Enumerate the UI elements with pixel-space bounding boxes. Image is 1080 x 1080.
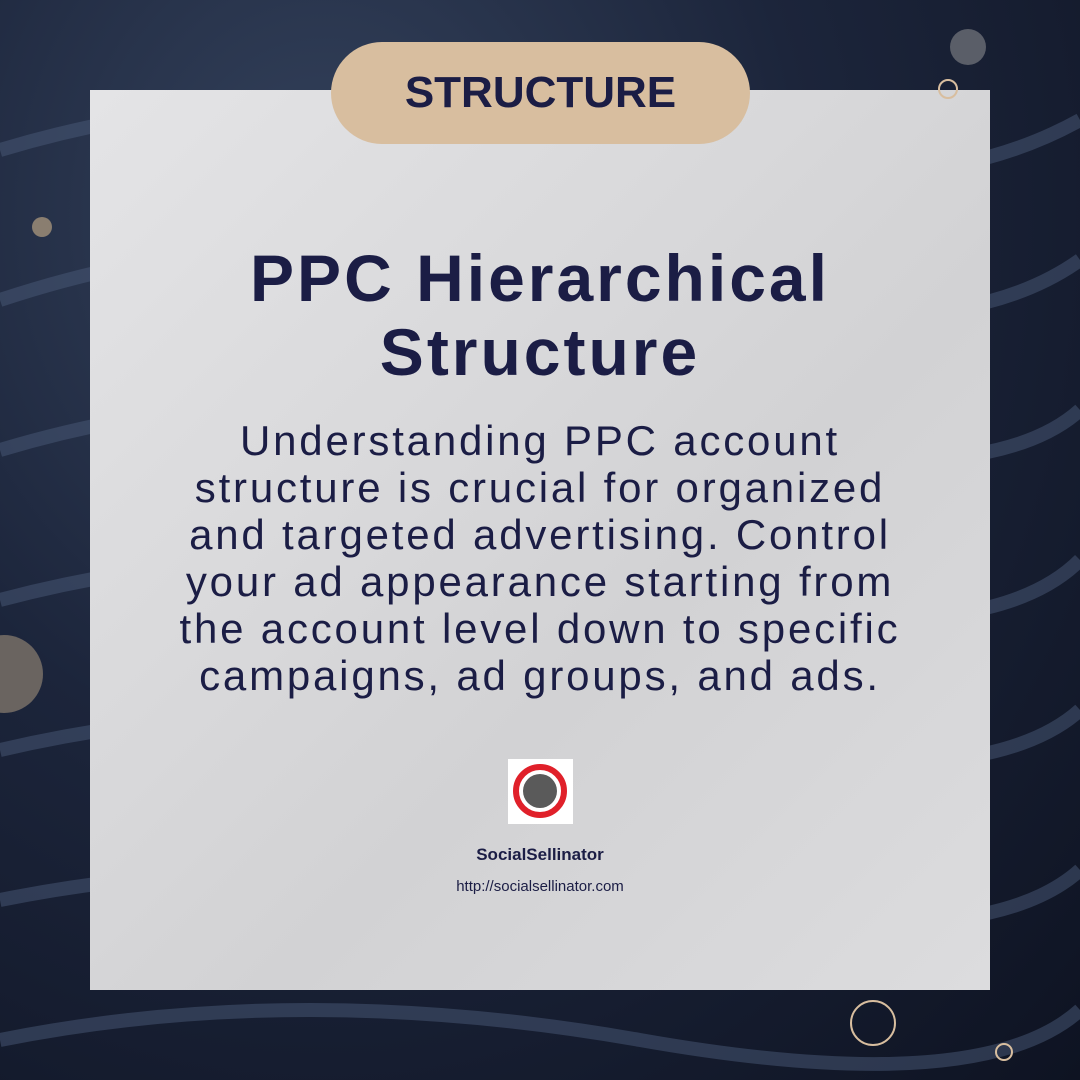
brand name: SocialSellinator xyxy=(476,845,604,864)
body text: and targeted advertising. Control xyxy=(189,511,891,558)
url: http://socialsellinator.com xyxy=(456,878,624,895)
body text: Understanding PPC account xyxy=(240,417,840,464)
body text: campaigns, ad groups, and ads. xyxy=(199,652,881,699)
body text: your ad appearance starting from xyxy=(186,558,894,605)
tag: STRUCTURE: STRUCTURE xyxy=(405,68,676,117)
body text: the account level down to specific xyxy=(180,605,900,652)
body text: structure is crucial for organized xyxy=(195,464,885,511)
title: Structure xyxy=(380,315,700,389)
tag: STRUCTURE xyxy=(331,42,750,144)
decorative circles xyxy=(950,29,986,65)
main panel xyxy=(90,90,990,990)
body text xyxy=(180,417,900,699)
logo xyxy=(508,759,573,824)
title: PPC Hierarchical xyxy=(250,241,830,315)
title xyxy=(250,241,830,389)
